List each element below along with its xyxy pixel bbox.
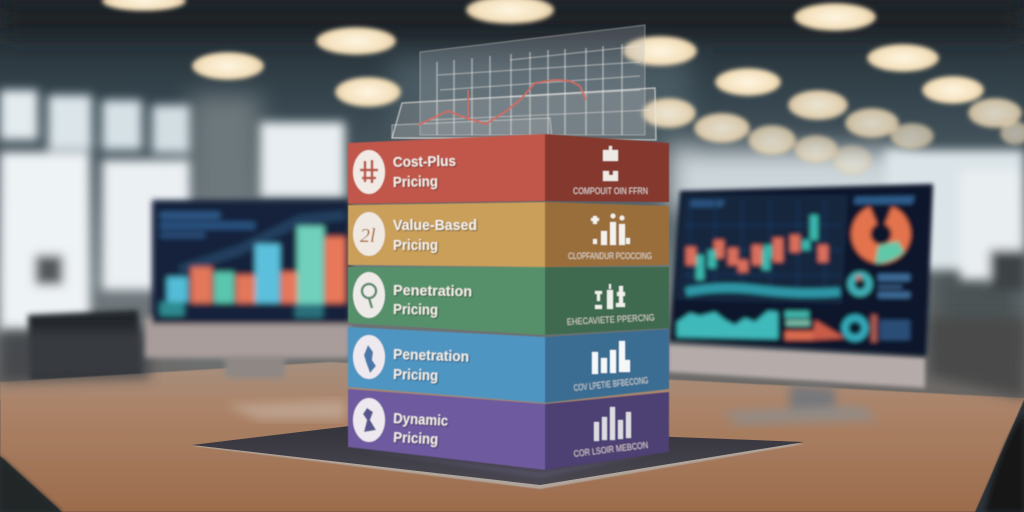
line chart: right monitor: [684, 200, 842, 293]
tier: Penetration Pricing (blue): Penetration: [393, 346, 469, 366]
tier: Penetration Pricing (blue): [348, 327, 669, 403]
tier: Penetration Pricing (green): EHECAVIETE PPERCNG: [567, 312, 655, 327]
ceiling lights: [102, 0, 1024, 175]
trend line: [418, 80, 586, 125]
small donut: [851, 274, 910, 298]
glass platform: [192, 425, 804, 489]
left monitor: [145, 200, 350, 378]
tier: Cost-Plus Pricing: COMPOUIT OIN FFRN: [573, 186, 648, 196]
tier: Dynamic Pricing: Pricing: [393, 429, 439, 448]
office background: [0, 0, 1024, 400]
tier: Cost-Plus Pricing: [348, 134, 669, 204]
bottom bars: [677, 311, 910, 342]
tier: Value-Based Pricing: 2l: [360, 225, 376, 247]
tier: Dynamic Pricing: COR LSOIR MEBCON: [573, 440, 649, 459]
tier: Penetration Pricing (green): Penetration: [393, 282, 472, 300]
tier: Penetration Pricing (green): Pricing: [393, 301, 438, 319]
tier: Value-Based Pricing: CLOPFANDUR PCOCCING: [568, 251, 652, 261]
tier: Cost-Plus Pricing: Pricing: [393, 173, 438, 191]
bar chart: left monitor: [160, 226, 345, 318]
tier: Value-Based Pricing: [348, 202, 669, 267]
tier: Penetration Pricing (green): [348, 267, 669, 335]
tier: Dynamic Pricing: Dynamic: [393, 410, 449, 430]
tier: Value-Based Pricing: Value-Based: [393, 217, 477, 234]
donut chart: [855, 208, 907, 263]
tier: Value-Based Pricing: Pricing: [393, 237, 438, 254]
holographic chart panels: [392, 25, 656, 140]
tier: Cost-Plus Pricing: Cost-Plus: [393, 153, 456, 171]
right monitor: [668, 184, 933, 425]
chair: [28, 310, 142, 380]
tier: Dynamic Pricing: [348, 389, 669, 470]
tier: Penetration Pricing (blue): Pricing: [393, 366, 438, 385]
table: [0, 318, 1024, 512]
tier: Penetration Pricing (blue): COV LPETIE BFBECONG: [573, 375, 649, 393]
pricing stack: [348, 134, 669, 470]
